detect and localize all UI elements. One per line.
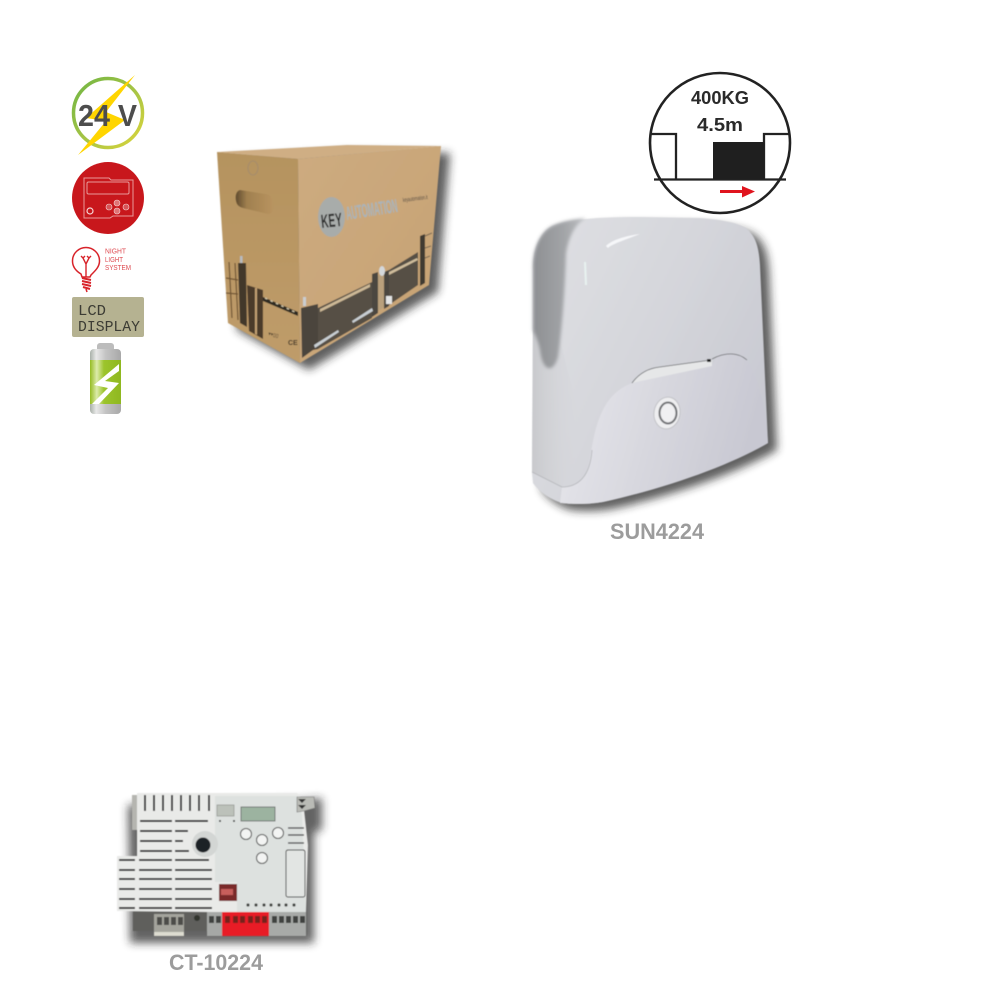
- board dark base: [133, 908, 207, 931]
- box front panel: [298, 146, 441, 363]
- icon: LCD display: LCD: [78, 303, 106, 320]
- icon: battery: [90, 343, 121, 414]
- icon: night light system: NIGHT: [105, 248, 127, 256]
- motor body: [532, 217, 768, 504]
- gate motor SUN4224: [532, 217, 777, 511]
- capacity text: 400KG: [691, 88, 749, 108]
- icon: 24 V: [74, 75, 142, 155]
- gate artwork on side: CE: [288, 340, 298, 347]
- motor highlights: [606, 234, 640, 248]
- box handle: [236, 190, 273, 214]
- icon: 24 V: 24 V: [78, 98, 137, 133]
- icon: LCD display: DISPLAY: [78, 319, 140, 336]
- key automation logo: keyautomation.it: [403, 195, 428, 204]
- motor dark side recess: [533, 218, 586, 368]
- box side panel: [217, 152, 300, 363]
- key automation logo: [318, 195, 428, 237]
- label: CT-10224: CT-10224: [169, 950, 264, 975]
- box shadow: [226, 152, 450, 370]
- box top: [217, 145, 441, 159]
- top vents: [145, 795, 209, 811]
- connector top: [217, 805, 234, 816]
- dip switch: [219, 884, 237, 901]
- icon: night light system: LIGHT: [105, 257, 124, 264]
- board shadow: [128, 798, 322, 943]
- gate artwork on side: ▾▾▯▯: [268, 331, 279, 340]
- icon: LCD display: [72, 297, 144, 337]
- side clip: [297, 797, 315, 812]
- motor lower left shading: [532, 330, 585, 487]
- terminal dots: [246, 903, 296, 907]
- motor logo button: [651, 395, 683, 431]
- motor base: [532, 450, 592, 487]
- terminal blocks: [207, 912, 223, 936]
- label: SUN4224: SUN4224: [610, 519, 705, 544]
- icon: night light system: [72, 248, 131, 292]
- icon: night light system: SYSTEM: [105, 265, 131, 272]
- side logo: [248, 161, 258, 175]
- motor shadow: [541, 224, 777, 511]
- load capacity badge: 4.5m: [697, 115, 743, 135]
- icon: red control panel: [72, 162, 144, 234]
- LCD screen: [241, 807, 275, 821]
- product box: [217, 145, 450, 370]
- key automation logo: AUTOMATION: [344, 196, 399, 225]
- red arrow: [720, 186, 755, 198]
- load capacity badge: [650, 73, 790, 213]
- gate artwork on front: [301, 233, 432, 358]
- gate artwork on side: [226, 256, 298, 347]
- grey-blue faceplate: [215, 796, 306, 912]
- side vents: [119, 821, 212, 908]
- key automation logo: KEY: [320, 210, 343, 233]
- side panel outline and vents: [286, 850, 305, 897]
- motor lid edge: [632, 360, 712, 383]
- white housing: [117, 793, 308, 912]
- motor lower cover: [560, 353, 768, 504]
- control board CT-10224: [117, 793, 322, 943]
- board buttons: [240, 828, 284, 864]
- knob: [192, 831, 218, 857]
